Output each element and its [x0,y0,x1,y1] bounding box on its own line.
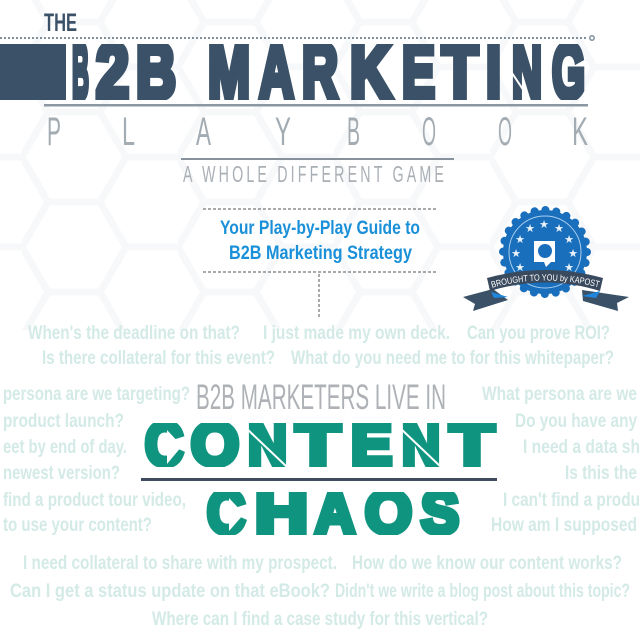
background questions: persona are we targeting? [3,384,190,405]
subtitle: PLAYBOOK: O [422,110,436,154]
heading: CONTENT: E [351,411,392,478]
heading: CONTENT: T [296,411,340,478]
heading: CHAOS: H [255,479,308,546]
background questions: I just made my own deck. [263,323,450,344]
badge: Brought to you by Kapost: ★ [515,261,525,274]
title: B2B MARKETING: N [512,27,542,115]
rule above tagline [181,158,454,160]
subtitle: PLAYBOOK: B [347,110,360,154]
badge: Brought to you by Kapost: ★ [564,261,574,274]
heading: CONTENT: O [191,411,239,478]
guide callout: Your Play-by-Play Guide to [220,218,420,239]
background questions: product launch? [3,411,124,432]
badge: Brought to you by Kapost: ★ [525,222,535,235]
badge: Brought to you by Kapost [463,206,629,311]
background questions [3,323,640,630]
title: B2B MARKETING: I [486,27,501,115]
badge: Brought to you by Kapost: ★ [515,233,525,246]
heading: CONTENT: T [450,411,494,478]
title: B2B MARKETING: K [350,27,392,115]
subtitle: PLAYBOOK [47,110,588,154]
background questions: When's the deadline on that? [28,323,240,344]
badge: Brought to you by Kapost: ★ [554,222,564,235]
heading: CONTENT: C [145,411,183,478]
title: B2B MARKETING: R [302,27,338,115]
rule between headings [141,478,497,481]
badge: Brought to you by Kapost: BROUGHT TO YOU by KAPOST [491,274,600,288]
title: B2B MARKETING: B [136,27,176,115]
badge: Brought to you by Kapost: ★ [539,218,549,231]
guide callout [203,209,437,318]
subtitle: PLAYBOOK: K [572,110,588,154]
heading: CHAOS: O [365,479,412,546]
background questions: eet by end of day. [3,437,127,458]
heading: CONTENT [144,423,497,467]
title: B2B MARKETING: A [259,27,294,115]
title: B2B MARKETING: E [402,27,435,115]
background questions: newest version? [3,463,120,484]
heading: CONTENT: N [402,411,440,478]
title: B2B MARKETING: G [552,27,585,115]
title: B2B MARKETING [0,44,584,100]
title: B2B MARKETING: B [72,27,89,115]
guide callout: B2B Marketing Strategy [229,243,412,264]
heading: CHAOS [206,492,460,535]
background questions: Is there collateral for this event? [42,348,275,369]
title: THE: THE [44,9,77,37]
subtitle: PLAYBOOK: A [196,110,211,154]
background questions: find a product tour video, [3,490,186,511]
title: B2B MARKETING: 2 [96,27,129,115]
subtitle: PLAYBOOK: P [47,110,61,154]
heading: CHAOS: A [315,479,355,546]
background questions: Can I get a status update on that eBook? [10,581,330,602]
title: B2B MARKETING: M [208,27,250,115]
rule under title [44,104,588,106]
heading: CHAOS: C [207,479,245,546]
heading: CHAOS: S [421,479,459,546]
heading: B2B marketers live in: B2B MARKETERS LIVE IN [196,378,446,417]
heading: CONTENT: N [248,411,287,478]
background questions: to use your content? [3,515,152,536]
dotted line with end circle [0,36,594,40]
tagline: A WHOLE DIFFERENT GAME [183,163,447,188]
background questions: Where can I find a case study for this vertical? [152,609,488,630]
subtitle: PLAYBOOK: Y [275,110,291,154]
badge: Brought to you by Kapost: ★ [568,247,578,260]
badge: Brought to you by Kapost: ★ [564,233,574,246]
subtitle: PLAYBOOK: O [498,110,512,154]
badge: Brought to you by Kapost: ★ [511,247,521,260]
background questions: I need collateral to share with my prospect. [23,553,337,574]
subtitle: PLAYBOOK: L [122,110,135,154]
title: B2B MARKETING: T [442,27,478,115]
